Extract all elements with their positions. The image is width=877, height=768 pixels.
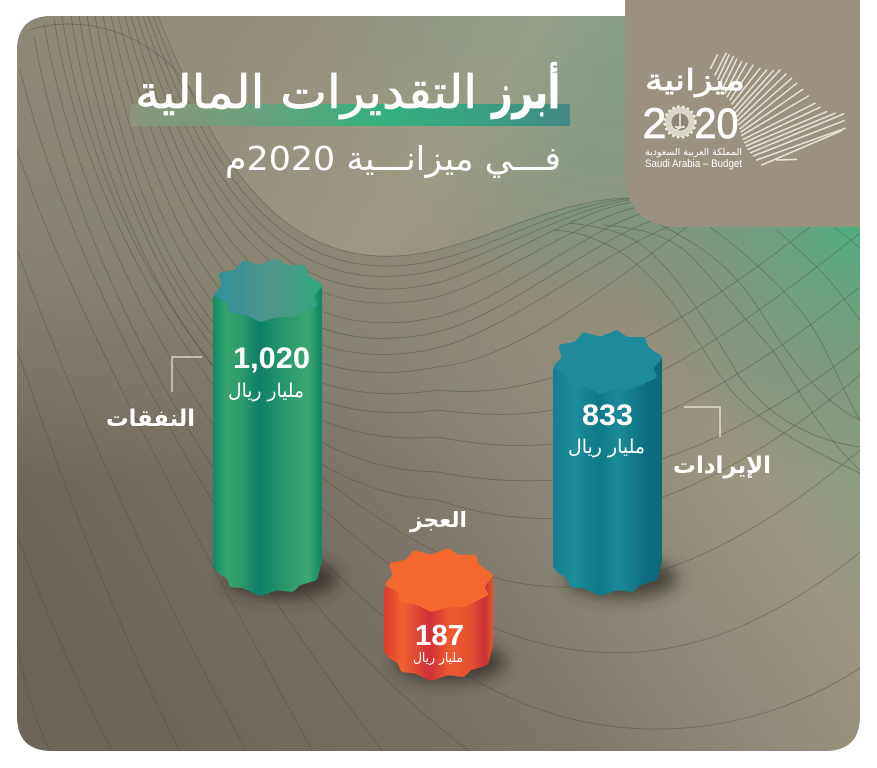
callout bracket: expenditure bbox=[172, 357, 202, 392]
logo line: english name: Saudi Arabia – Budget bbox=[645, 158, 742, 170]
subtitle: فـــي ميزانـــية 2020م bbox=[225, 139, 561, 178]
icon: map of Saudi Arabia hatching bbox=[711, 53, 845, 165]
label: expenditure: النفقات bbox=[106, 406, 195, 432]
panel: logo block bbox=[625, 0, 860, 227]
unit: expenditure: مليار ريال bbox=[228, 380, 304, 402]
logo number: 2: 2 bbox=[643, 100, 666, 148]
title: التقديرات المالية bbox=[135, 65, 477, 120]
label: revenue: الإيرادات bbox=[673, 453, 771, 479]
unit: deficit: مليار ريال bbox=[413, 651, 463, 666]
logo number: 20: 20 bbox=[694, 100, 738, 148]
value: revenue: 833 bbox=[582, 399, 633, 432]
column: expenditure bbox=[213, 258, 338, 598]
title highlight bar bbox=[130, 104, 570, 126]
title bbox=[135, 62, 560, 120]
callout bracket: revenue bbox=[684, 407, 720, 437]
title: أبرز bbox=[490, 62, 560, 119]
logo word: budget: ميزانية bbox=[645, 63, 745, 97]
column: revenue bbox=[553, 330, 678, 598]
label: deficit: العجز bbox=[409, 508, 467, 532]
logo line: kingdom name: المملكة العربية السعودية bbox=[645, 147, 742, 158]
icon: national emblem bbox=[664, 106, 696, 138]
unit: revenue: مليار ريال bbox=[568, 436, 645, 458]
value: expenditure: 1,020 bbox=[233, 342, 310, 375]
column: deficit bbox=[384, 548, 506, 682]
value: deficit: 187 bbox=[415, 620, 464, 652]
